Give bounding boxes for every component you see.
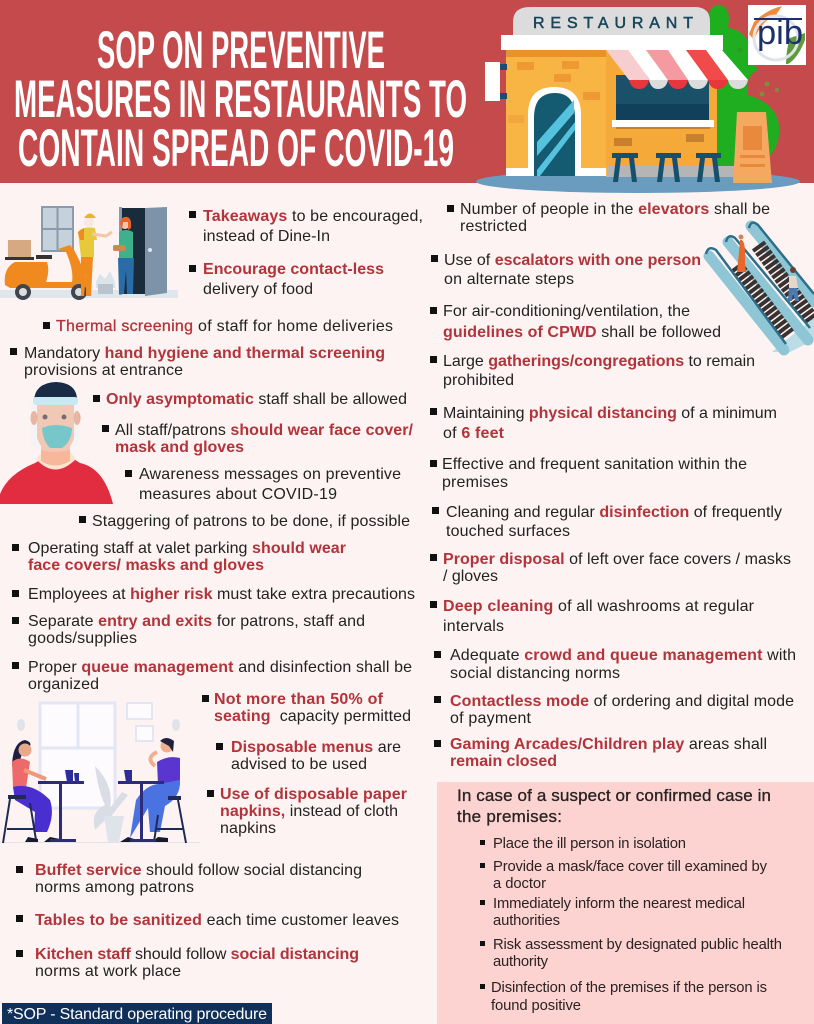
bullet: gaming arcades: remain closed [450,753,557,770]
bullet: buffet service: Buffet service should follow social distancing [35,862,362,879]
bullet: contact-less delivery: Encourage contact-less [203,261,384,278]
bullet: deep cleaning: intervals [443,618,504,635]
bullet: isolation: Place the ill person in isolation [493,836,686,852]
icon: pib logo: pib [757,14,803,52]
bullet: seating capacity: seating capacity permitted [214,708,411,725]
bullet: paper napkins: napkins, instead of cloth [220,803,398,820]
bullet: physical distancing [430,405,777,442]
woman [12,740,30,770]
bullet: sanitation: Effective and frequent sanitation within the [442,456,747,473]
bullet: gatherings: Large gatherings/congregations to remain [443,353,755,370]
bullet: physical distancing: of 6 feet [443,425,505,442]
bullet: mask till examined [480,859,768,892]
bullet: escalators [431,252,701,288]
bullet: crowd management: Adequate crowd and queue management with [450,647,796,664]
bullet: mask till examined: a doctor [493,876,546,892]
bullet: disposable menus: Disposable menus are [231,739,401,756]
bullet: deep cleaning [430,598,755,635]
bullet: escalators: on alternate steps [444,271,574,288]
bullet: staggering: Staggering of patrons to be done, if possible [92,513,410,530]
bullet: disinfection of premises: found positive [491,998,581,1014]
bullet: sanitation [430,456,747,491]
bullet: valet parking [12,540,346,574]
bullet: inform authorities [480,896,745,929]
bullet: mask till examined: Provide a mask/face cover till examined by [493,859,768,875]
bullet: paper napkins: napkins [220,820,276,837]
footnote: *SOP - Standard operating procedure [7,1006,267,1023]
bullet: physical distancing: Maintaining physical distancing of a minimum [443,405,777,422]
bullet: paper napkins: Use of disposable paper [220,786,407,803]
bullet: buffet service [16,862,362,896]
bullet: disposable menus: advised to be used [231,756,367,773]
bullet: face cover [102,422,414,456]
title: SOP ON PREVENTIVE [97,21,385,80]
panel heading [457,786,771,826]
icon: restaurant building [476,5,800,193]
bullet: disinfection of premises [480,980,767,1014]
bullet: takeaways: Takeaways to be encouraged, [203,208,423,225]
bullet: hand hygiene [10,345,385,379]
man [160,740,174,752]
bullet: contactless mode [434,693,794,727]
bullet: contact-less delivery [189,261,384,298]
panel heading: the premises: [457,807,562,826]
bullet: crowd management [434,647,796,682]
bullet: takeaways: instead of Dine-In [203,228,330,245]
bullet: thermal screening: Thermal screening of staff for home deliveries [56,318,393,335]
bullet: seating capacity [202,691,411,725]
icon: delivery scene [0,207,178,300]
bullet: awareness messages: measures about COVID-19 [139,486,337,503]
bullet: seating capacity: Not more than 50% of [214,691,384,708]
bullet: inform authorities: Immediately inform the nearest medical [493,896,745,912]
bullet: queue management [12,659,412,693]
bullet: disinfection [432,504,782,540]
bullet: escalators: Use of escalators with one person [444,252,701,269]
bullet: gatherings [430,353,755,389]
left column bullets [10,208,423,980]
icon: man with face shield [0,382,113,504]
bullet: gatherings: prohibited [443,372,514,389]
bullet: elevators [447,201,770,235]
title [14,21,467,178]
bullet: air conditioning: For air-conditioning/ventilation, the [443,303,690,320]
bullet: disinfection of premises: Disinfection of the premises if the person is [491,980,767,996]
bullet: takeaways [189,208,423,245]
bullet: sanitation: premises [442,474,508,491]
bullet: risk assessment: authority [493,954,549,970]
bullet: awareness messages: Awareness messages on preventive [139,466,401,483]
icon: restaurant building: RESTAURANT [533,15,693,32]
bullet: contactless mode: Contactless mode of ordering and digital mode [450,693,794,710]
bullet: risk assessment: Risk assessment by designated public health [493,937,782,953]
bullet: queue management: organized [28,676,99,693]
bullet: gaming arcades: Gaming Arcades/Children play areas shall [450,736,767,753]
bullet: proper disposal: / gloves [443,568,498,585]
icon: dining scene [0,703,200,843]
bullet: entry and exits [12,613,365,647]
bullet: deep cleaning: Deep cleaning of all washrooms at regular [443,598,755,615]
panel: suspect or confirmed case [437,782,814,1024]
bullet: disinfection: Cleaning and regular disinfection of frequently [446,504,782,521]
bullet: tables sanitized: Tables to be sanitized each time customer leaves [35,912,399,929]
panel heading: In case of a suspect or confirmed case in [457,786,771,805]
title: CONTAIN SPREAD OF COVID-19 [18,119,454,178]
bullet: paper napkins [207,786,407,837]
bullet: face cover: mask and gloves [115,439,244,456]
bullet: asymptomatic staff: Only asymptomatic staff shall be allowed [106,391,407,408]
header banner [0,0,814,183]
bullet: kitchen staff: Kitchen staff should follow social distancing [35,946,359,963]
bullet: disposable menus [216,739,401,773]
bullet: contact-less delivery: delivery of food [203,281,313,298]
bullet: face cover: All staff/patrons should wear face cover/ [115,422,414,439]
bullet: queue management: Proper queue management and disinfection shall be [28,659,412,676]
bullet: contactless mode: of payment [450,710,532,727]
bullet: proper disposal [430,551,791,585]
bullet: awareness messages [125,466,401,503]
bullet: air conditioning: guidelines of CPWD shall be followed [443,324,721,341]
bullet: risk assessment [480,937,782,970]
bullet: higher risk: Employees at higher risk must take extra precautions [28,586,415,603]
icon: escalators [706,223,814,352]
bullet: hand hygiene: Mandatory hand hygiene and thermal screening [24,345,385,362]
bullet: kitchen staff [16,946,359,980]
bullet: valet parking: face covers/ masks and gloves [28,557,264,574]
bullet: crowd management: social distancing norms [450,665,620,682]
bullet: proper disposal: Proper disposal of left over face covers / masks [443,551,791,568]
icon: pib logo [748,5,806,65]
bullet: inform authorities: authorities [493,913,560,929]
bullet: entry and exits: goods/supplies [28,630,137,647]
bullet: air conditioning [430,303,721,341]
right column bullets [430,201,796,770]
bullet: elevators: Number of people in the elevators shall be [460,201,770,218]
bullet: gaming arcades [434,736,767,770]
bullet: entry and exits: Separate entry and exits for patrons, staff and [28,613,365,630]
bullet: valet parking: Operating staff at valet parking should wear [28,540,346,557]
bullet: hand hygiene: provisions at entrance [24,362,183,379]
bullet: elevators: restricted [460,218,527,235]
bullet: buffet service: norms among patrons [35,879,194,896]
bullet: disinfection: touched surfaces [446,523,570,540]
bullet: kitchen staff: norms at work place [35,963,181,980]
